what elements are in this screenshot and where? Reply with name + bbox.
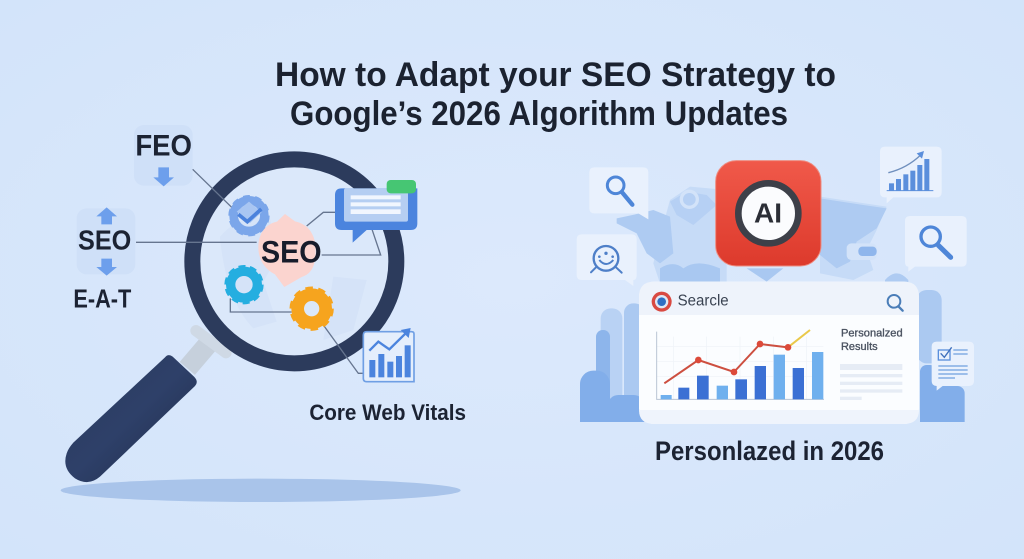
label: FEO with down arrow — [134, 125, 193, 186]
label: FEO with down arrow: FEO — [135, 129, 192, 162]
search bar text: Searcle — [678, 293, 729, 310]
label: SEO with up and down arrows — [77, 207, 135, 276]
panel: AI personalized search illustration — [577, 147, 974, 444]
bubble: search icon right — [905, 216, 967, 272]
icon: pink SEO badge — [258, 214, 322, 287]
panel: AI app tile — [716, 161, 821, 266]
icon: blue check gear — [230, 197, 268, 235]
bubble: growth chart — [880, 147, 942, 203]
chart: bars and trend line — [657, 330, 824, 399]
icon: chat message card — [335, 180, 417, 243]
icon: browser logo — [652, 292, 672, 312]
personalized results text — [841, 328, 903, 353]
bubble: checklist — [932, 342, 974, 391]
bubble: search icon left — [589, 167, 648, 219]
label: Core Web Vitals: Core Web Vitals — [309, 400, 466, 425]
title: How to Adapt your SEO Strategy to — [275, 56, 836, 94]
city skyline silhouettes — [580, 290, 965, 422]
panel: magnifying glass SEO illustration — [61, 125, 466, 502]
panel: search results card — [639, 282, 919, 424]
personalized results text: Results — [841, 341, 878, 353]
label: SEO with up and down arrows: SEO — [78, 224, 131, 255]
icon: orange gear — [292, 289, 332, 329]
ground shadow — [61, 479, 461, 502]
panel: AI app tile: AI — [754, 198, 782, 229]
icon: card search — [888, 295, 903, 311]
magnifier handle — [65, 331, 226, 482]
world map — [617, 187, 908, 287]
icon: teal gear — [227, 267, 261, 302]
bubble: smiley — [577, 234, 637, 286]
connector lines — [136, 169, 381, 373]
label: E-A-T: E-A-T — [73, 284, 131, 314]
title: Google’s 2026 Algorithm Updates — [290, 95, 788, 133]
magnifier lens and ring — [192, 159, 396, 363]
caption: Personlazed in 2026: Personlazed in 2026 — [655, 436, 884, 466]
personalized results text: Personalzed — [841, 328, 903, 340]
icon: pink SEO badge: SEO — [261, 235, 322, 270]
placeholder result lines — [840, 364, 902, 400]
icon: bar chart card — [363, 328, 414, 382]
title — [275, 56, 836, 133]
